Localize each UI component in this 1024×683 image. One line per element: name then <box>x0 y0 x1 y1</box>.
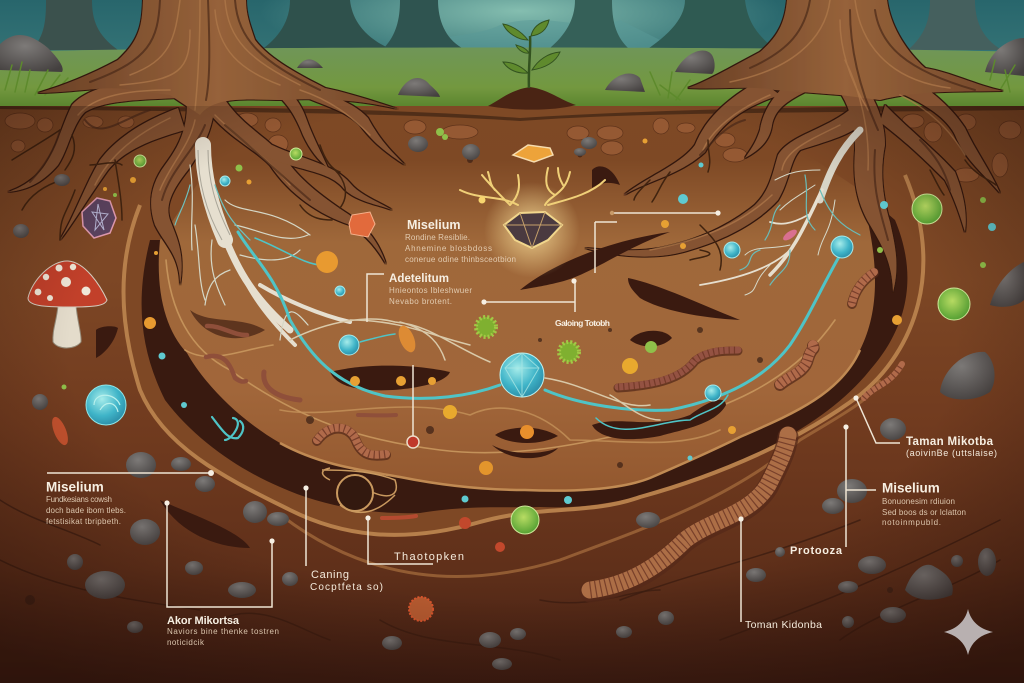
label: Akor Mikortsa: Naviors bine thenke tostren <box>167 627 279 636</box>
worm centre right <box>618 350 738 388</box>
teal orbs <box>220 176 853 401</box>
surface rocks <box>0 35 1024 97</box>
label: Miselium left: Miselium <box>46 480 104 494</box>
label: Galoing Totobh <box>481 278 610 328</box>
label: Taman Mikotba: (aoivinBe (uttslaise) <box>906 448 997 458</box>
label: Miselium left: doch bade ibom tlebs. <box>46 506 126 515</box>
forest background <box>0 0 1024 110</box>
mushroom cap <box>28 261 107 307</box>
large earthworm <box>590 435 788 592</box>
left tree body <box>8 0 405 285</box>
small soil dots <box>25 128 996 623</box>
label: Miselium right: notoinmpubld. <box>882 518 941 527</box>
sapling leaves <box>503 20 560 73</box>
worm left group <box>206 326 416 518</box>
right tree <box>585 0 1003 292</box>
white root fibres in basin <box>290 319 660 420</box>
orange gem <box>349 212 375 237</box>
label: Akor Mikortsa <box>164 500 279 647</box>
label: Miselium left: fetstisikat tbripbeth. <box>46 517 121 526</box>
label: Miselium right: Miselium <box>882 480 940 496</box>
label: Miselium centre: conerue odine thinbsceotbion <box>405 255 516 264</box>
label: Miselium right: Sed boos ds or lclatton <box>882 508 966 517</box>
label: Caning: Caning <box>311 569 349 581</box>
label: Miselium centre: Ahnemine blosbdoss <box>405 244 492 253</box>
soil layers <box>0 150 1000 660</box>
label: Galoing Totobh: Galoing Totobh <box>555 318 610 328</box>
left small rootlets <box>12 130 345 240</box>
leader line from red node <box>412 365 414 436</box>
label: Adetelitum <box>367 273 472 322</box>
label: Toman Kidonba: Toman Kidonba <box>745 619 822 631</box>
right mycelium strand <box>700 130 860 295</box>
label: Taman Mikotba: Taman Mikotba <box>906 436 994 448</box>
label: Miselium right <box>843 424 966 547</box>
label: Miselium centre: Rondine Resiblie. <box>405 233 470 242</box>
right trunk fibres <box>650 0 975 250</box>
sapling <box>488 20 576 110</box>
top soil stones <box>5 113 1021 182</box>
meadow <box>0 48 1024 115</box>
sapling soil mound <box>488 87 576 110</box>
label: Akor Mikortsa: noticidcik <box>167 638 205 647</box>
label: Toman Kidonba <box>738 516 822 631</box>
orange spores <box>49 251 638 621</box>
central blue crystal <box>500 353 544 397</box>
sparkle watermark <box>944 609 993 655</box>
burrows <box>96 166 740 548</box>
label: Miselium left: Fundkesians cowsh <box>46 495 112 504</box>
red node marker <box>407 436 419 448</box>
sapling stem <box>529 36 530 88</box>
label: Protooza: Protooza <box>790 545 843 557</box>
ground surface edge <box>0 106 1024 121</box>
teal hypha line <box>212 232 840 440</box>
left tree <box>8 0 405 285</box>
mushroom <box>28 261 107 348</box>
subsoil rocks <box>13 136 1024 670</box>
label: Akor Mikortsa: Akor Mikortsa <box>167 615 240 627</box>
glowing dark crystal <box>460 168 605 278</box>
label: Adetelitum: Nevabo brotent. <box>389 297 452 306</box>
label: Adetelitum: Hnieontos Ibleshwuer <box>389 286 472 295</box>
mushroom spots <box>35 264 90 301</box>
label: Miselium right: Bonuonesim rdiuion <box>882 497 955 506</box>
amber tile <box>513 145 553 162</box>
label: Thaotopken: Thaotopken <box>394 551 464 563</box>
coiled nest <box>322 468 396 512</box>
earthworms <box>206 272 902 592</box>
spiky green microbes <box>476 317 579 362</box>
worm far right <box>864 364 902 398</box>
blue orb <box>86 385 126 425</box>
label: Thaotopken <box>365 515 464 564</box>
label: Caning: Cocptfeta so) <box>310 582 383 593</box>
worm bottom centre-left <box>317 428 386 456</box>
worm right <box>780 345 814 385</box>
label: Taman Mikotba <box>853 395 997 458</box>
left mycelium strand <box>175 145 350 345</box>
left trunk fibres <box>30 0 370 200</box>
leader lines upper right <box>595 210 721 273</box>
right tree body <box>585 0 1003 292</box>
label: Adetelitum: Adetelitum <box>389 273 449 285</box>
left crystal <box>82 198 116 238</box>
green orbs <box>134 148 970 534</box>
label: Caning <box>303 485 383 593</box>
grass tufts <box>5 60 1015 100</box>
worm upper right <box>852 272 874 304</box>
label: Miselium left <box>46 470 214 526</box>
right small rootlets <box>634 140 996 270</box>
mushroom stem <box>53 305 81 348</box>
label: Miselium centre <box>405 218 516 264</box>
label: Miselium centre: Miselium <box>407 218 460 232</box>
